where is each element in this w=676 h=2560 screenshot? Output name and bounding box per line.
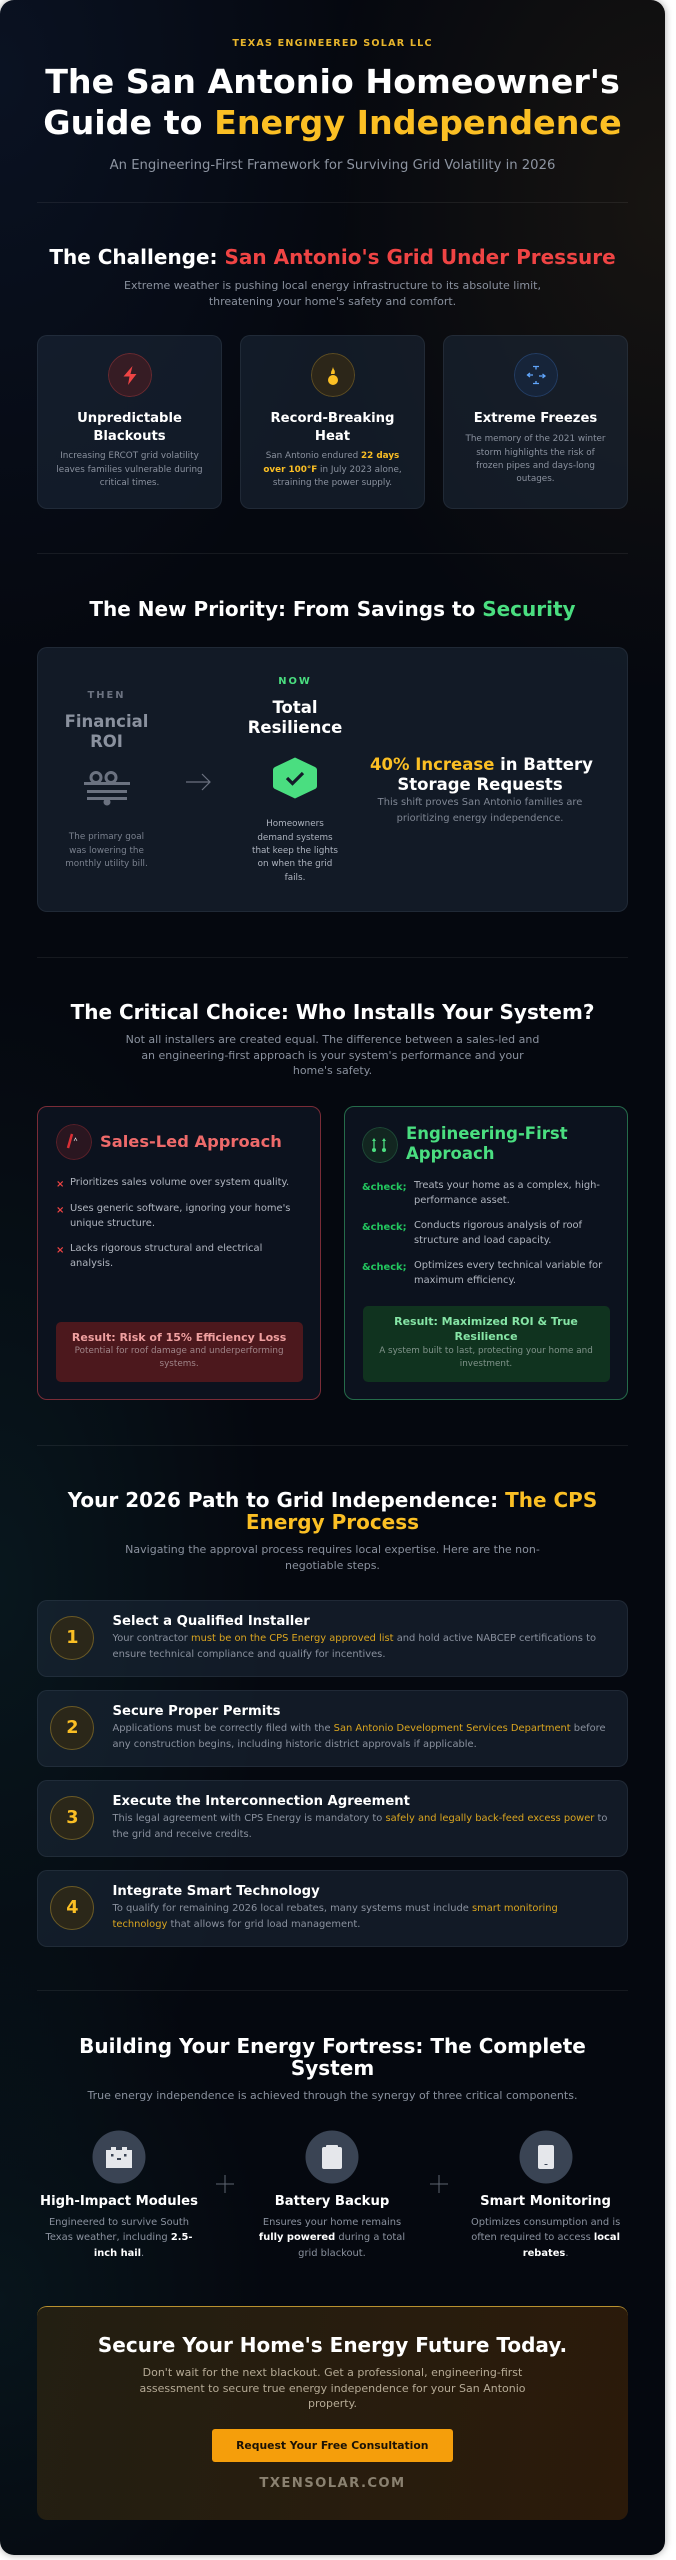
- sales-led drawbacks list: [56, 1177, 290, 1269]
- panel: unpredictable blackouts: [37, 335, 222, 509]
- then title: [65, 712, 148, 751]
- engineering-first benefits list: Treats your home as a complex, high-: [414, 1180, 600, 1191]
- step number: 2: [66, 1718, 79, 1738]
- component: battery backup: [249, 2130, 415, 2265]
- step description: To qualify for remaining 2026 local rebates, many systems must include smart monitoring: [112, 1903, 558, 1914]
- now description: Homeowners: [266, 819, 324, 829]
- card description: storm highlights the risk of: [476, 448, 595, 458]
- card description: The memory of the 2021 winter: [465, 434, 606, 444]
- card title: Extreme Freezes: [474, 411, 597, 426]
- result title: Result: Risk of 15% Efficiency Loss: [72, 1331, 286, 1344]
- panel: extreme freezes: [443, 335, 628, 509]
- then title: ROI: [90, 732, 123, 751]
- statistic headline: [370, 755, 593, 794]
- step description: Your contractor must be on the CPS Energy approved list and hold active NABCEP certifications to: [112, 1633, 596, 1644]
- step number: 1: [66, 1628, 79, 1648]
- panel: step 4: [37, 1870, 628, 1947]
- component: high-impact modules: [36, 2130, 202, 2265]
- card description: [56, 451, 203, 488]
- card description: critical times.: [100, 478, 159, 488]
- step description: Applications must be correctly filed with the San Antonio Development Services Department before: [112, 1723, 606, 1734]
- drawback 2: [56, 1203, 290, 1229]
- icon: arrow: [186, 774, 211, 790]
- statistic headline: Storage Requests: [397, 775, 563, 794]
- CTA description: assessment to secure true energy independence for your San Antonio: [139, 2382, 526, 2395]
- card title: [77, 411, 182, 444]
- component description: Optimizes consumption and is: [471, 2217, 620, 2228]
- icon: plus: [216, 2175, 234, 2193]
- result title: Result: Maximized ROI & True: [394, 1315, 578, 1328]
- heading: CPS process: Your 2026 Path to Grid Independence: The CPS: [68, 1488, 597, 1512]
- step number: [50, 1706, 94, 1750]
- CTA description: property.: [308, 2397, 357, 2410]
- then description: The primary goal: [69, 832, 144, 842]
- heading: CPS process: [68, 1488, 597, 1534]
- step title: Integrate Smart Technology: [112, 1884, 320, 1899]
- CTA heading: Secure Your Home's Energy Future Today.: [98, 2333, 567, 2357]
- challenge intro text: Extreme weather is pushing local energy infrastructure to its absolute limit,: [124, 279, 541, 292]
- card title: Unpredictable: [77, 411, 182, 426]
- engineering-first benefits list: [362, 1180, 602, 1286]
- engineering-first benefits list: performance asset.: [414, 1195, 510, 1206]
- heading: CPS process: Energy Process: [246, 1510, 419, 1534]
- website: TXENSOLAR.COM: [259, 2476, 406, 2491]
- now title: Total: [272, 698, 318, 717]
- now column: [248, 676, 342, 883]
- subtitle: An Engineering-First Framework for Surviving Grid Volatility in 2026: [110, 158, 555, 173]
- panel: step 3: [37, 1780, 628, 1857]
- card title: Record-Breaking: [271, 411, 394, 426]
- step description: [112, 1631, 596, 1662]
- card description: Increasing ERCOT grid volatility: [60, 451, 199, 461]
- icon: shield check: [273, 758, 317, 798]
- component description: Texas weather, including 2.5-: [46, 2232, 192, 2243]
- then description: was lowering the: [69, 846, 144, 856]
- card title: [271, 411, 394, 444]
- component description: [249, 2215, 415, 2261]
- CTA button: Request Your Free Consultation: [236, 2439, 428, 2452]
- result description: [379, 1346, 593, 1369]
- step number: [50, 1886, 94, 1930]
- result title: Resilience: [454, 1330, 518, 1343]
- component: smart monitoring: [463, 2130, 629, 2265]
- sales-led drawbacks list: ×: [56, 1179, 64, 1190]
- CTA description: Don't wait for the next blackout. Get a professional, engineering-first: [143, 2366, 522, 2379]
- panel: call to action: [37, 2306, 628, 2520]
- panel: step 1: [37, 1600, 628, 1677]
- component description: Engineered to survive South: [49, 2217, 189, 2228]
- critical choice intro text: home's safety.: [293, 1064, 372, 1077]
- result description: Potential for roof damage and underperforming: [75, 1346, 284, 1356]
- statistic headline: 40% Increase in Battery: [370, 755, 593, 774]
- now label: NOW: [278, 676, 312, 687]
- icon: smartphone: [519, 2130, 573, 2184]
- now title: [248, 698, 342, 737]
- component description: fully powered during a total: [259, 2232, 405, 2243]
- benefit 2: [362, 1220, 582, 1246]
- energy fortress intro text: True energy independence is achieved through the synergy of three critical components.: [88, 2089, 577, 2102]
- critical choice intro text: Not all installers are created equal. The difference between a sales-led and: [126, 1033, 539, 1046]
- heading: energy fortress: [0, 2034, 665, 2080]
- CTA button: [212, 2429, 453, 2462]
- panel: engineering-first approach: [344, 1106, 628, 1400]
- eyebrow label: TEXAS ENGINEERED SOLAR LLC: [232, 38, 433, 49]
- heading: energy fortress: System: [291, 2056, 374, 2080]
- result description: [75, 1346, 284, 1369]
- then label: THEN: [87, 690, 126, 701]
- component title: Smart Monitoring: [480, 2194, 611, 2208]
- CPS process intro text: Navigating the approval process requires local expertise. Here are the non-: [125, 1543, 540, 1556]
- panel: record-breaking heat: [240, 335, 425, 509]
- component description: [463, 2215, 629, 2261]
- icon: bank: [84, 771, 130, 806]
- step description: technology that allows for grid load management.: [112, 1919, 360, 1930]
- step description: [112, 1901, 558, 1932]
- card description: [465, 434, 606, 484]
- component title: Battery Backup: [275, 2194, 389, 2208]
- now title: Resilience: [248, 718, 342, 737]
- critical choice intro text: [126, 1033, 539, 1077]
- then description: monthly utility bill.: [65, 859, 148, 869]
- title: The San Antonio Homeowner's: [45, 62, 620, 101]
- benefit 3: [362, 1260, 602, 1286]
- icon: solar modules: [92, 2130, 146, 2184]
- step title: Select a Qualified Installer: [112, 1614, 310, 1629]
- challenge intro text: [124, 279, 541, 308]
- engineering-first title: [406, 1124, 568, 1163]
- icon: battery: [305, 2130, 359, 2184]
- statistic callout: [370, 755, 593, 824]
- step number: [50, 1796, 94, 1840]
- engineering-first benefits list: maximum efficiency.: [414, 1275, 516, 1286]
- component description: often required to access local: [471, 2232, 620, 2243]
- sales-led result: [56, 1322, 303, 1382]
- engineering-first title: Approach: [406, 1144, 495, 1163]
- step number: 4: [66, 1898, 79, 1918]
- sales-led drawbacks list: Prioritizes sales volume over system quality.: [70, 1177, 289, 1188]
- card description: over 100°F in July 2023 alone,: [263, 465, 402, 475]
- heading: challenge: The Challenge: San Antonio's Grid Under Pressure: [49, 245, 616, 269]
- result title: [394, 1315, 578, 1343]
- CPS process intro text: [0, 1542, 665, 1573]
- statistic description: [378, 797, 582, 824]
- engineering-first benefits list: Conducts rigorous analysis of roof: [414, 1220, 582, 1231]
- icon: plus: [430, 2175, 448, 2193]
- then title: Financial: [65, 712, 148, 731]
- step description: the grid and receive credits.: [112, 1829, 252, 1840]
- engineering-first result: [362, 1306, 610, 1382]
- engineering-first benefits list: Optimizes every technical variable for: [414, 1260, 602, 1271]
- title: [43, 62, 622, 142]
- now description: on when the grid: [258, 859, 332, 869]
- CTA description: [37, 2365, 628, 2412]
- challenge intro text: threatening your home's safety and comfort.: [209, 295, 456, 308]
- sales-led drawbacks list: unique structure.: [70, 1218, 155, 1229]
- step title: Secure Proper Permits: [112, 1704, 280, 1719]
- result description: A system built to last, protecting your home and: [379, 1346, 593, 1356]
- step description: [112, 1811, 607, 1842]
- then description: [65, 832, 148, 869]
- component description: [36, 2215, 202, 2261]
- card description: [263, 451, 402, 488]
- step description: [112, 1721, 606, 1752]
- component description: Ensures your home remains: [263, 2217, 401, 2228]
- heading: energy fortress: Building Your Energy Fortress: The Complete: [79, 2034, 586, 2058]
- component description: rebates.: [523, 2248, 568, 2259]
- icon: sales gauge: [56, 1124, 92, 1160]
- card description: outages.: [516, 474, 555, 484]
- panel: then and now comparison: [37, 647, 628, 912]
- card title: Blackouts: [93, 429, 166, 444]
- component description: inch hail.: [94, 2248, 144, 2259]
- statistic description: prioritizing energy independence.: [397, 813, 563, 824]
- card description: frozen pipes and days-long: [476, 461, 595, 471]
- heading: new priority: The New Priority: From Savings to Security: [89, 597, 576, 621]
- now description: fails.: [285, 873, 305, 883]
- sales-led title: Sales-Led Approach: [100, 1132, 282, 1151]
- statistic description: This shift proves San Antonio families are: [378, 797, 582, 808]
- benefit 1: [362, 1180, 600, 1206]
- sales-led drawbacks list: ×: [56, 1245, 64, 1256]
- step number: 3: [66, 1808, 79, 1828]
- then column: [65, 690, 148, 869]
- critical choice intro text: an engineering-first approach is your system's performance and your: [141, 1049, 524, 1062]
- now description: [252, 819, 338, 883]
- drawback 3: [56, 1243, 262, 1269]
- card title: Heat: [315, 429, 350, 444]
- step description: ensure technical compliance and qualify for incentives.: [112, 1649, 385, 1660]
- result description: investment.: [460, 1359, 512, 1369]
- sales-led drawbacks list: Uses generic software, ignoring your home's: [70, 1203, 290, 1214]
- drawback 1: [56, 1177, 289, 1190]
- now description: that keep the lights: [252, 846, 338, 856]
- engineering-first benefits list: &check;: [362, 1222, 407, 1233]
- now description: demand systems: [257, 833, 333, 843]
- engineering-first benefits list: &check;: [362, 1262, 407, 1273]
- engineering-first benefits list: &check;: [362, 1182, 407, 1193]
- engineering-first title: Engineering-First: [406, 1124, 568, 1143]
- step description: any construction begins, including historic district approvals if applicable.: [112, 1739, 477, 1750]
- sales-led drawbacks list: analysis.: [70, 1258, 113, 1269]
- component description: grid blackout.: [298, 2248, 366, 2259]
- card description: leaves families vulnerable during: [56, 465, 203, 475]
- icon: sliders: [362, 1127, 398, 1163]
- result description: systems.: [160, 1359, 199, 1369]
- sales-led drawbacks list: ×: [56, 1205, 64, 1216]
- step title: Execute the Interconnection Agreement: [112, 1794, 410, 1809]
- card description: San Antonio endured 22 days: [266, 451, 399, 461]
- icon: thermometer: [311, 353, 355, 397]
- sales-led drawbacks list: Lacks rigorous structural and electrical: [70, 1243, 262, 1254]
- engineering-first benefits list: structure and load capacity.: [414, 1235, 551, 1246]
- heading: critical choice: The Critical Choice: Who Installs Your System?: [71, 1000, 594, 1024]
- title: Guide to Energy Independence: [43, 103, 622, 142]
- step description: This legal agreement with CPS Energy is mandatory to safely and legally back-feed excess power to: [112, 1813, 607, 1824]
- icon: lightning bolt: [108, 353, 152, 397]
- component title: High-Impact Modules: [40, 2194, 198, 2208]
- CPS process intro text: negotiable steps.: [285, 1559, 380, 1572]
- panel: sales-led approach: [37, 1106, 321, 1400]
- card description: straining the power supply.: [273, 478, 392, 488]
- step number: [50, 1616, 94, 1660]
- panel: step 2: [37, 1690, 628, 1767]
- icon: snowflake arrows: [514, 353, 558, 397]
